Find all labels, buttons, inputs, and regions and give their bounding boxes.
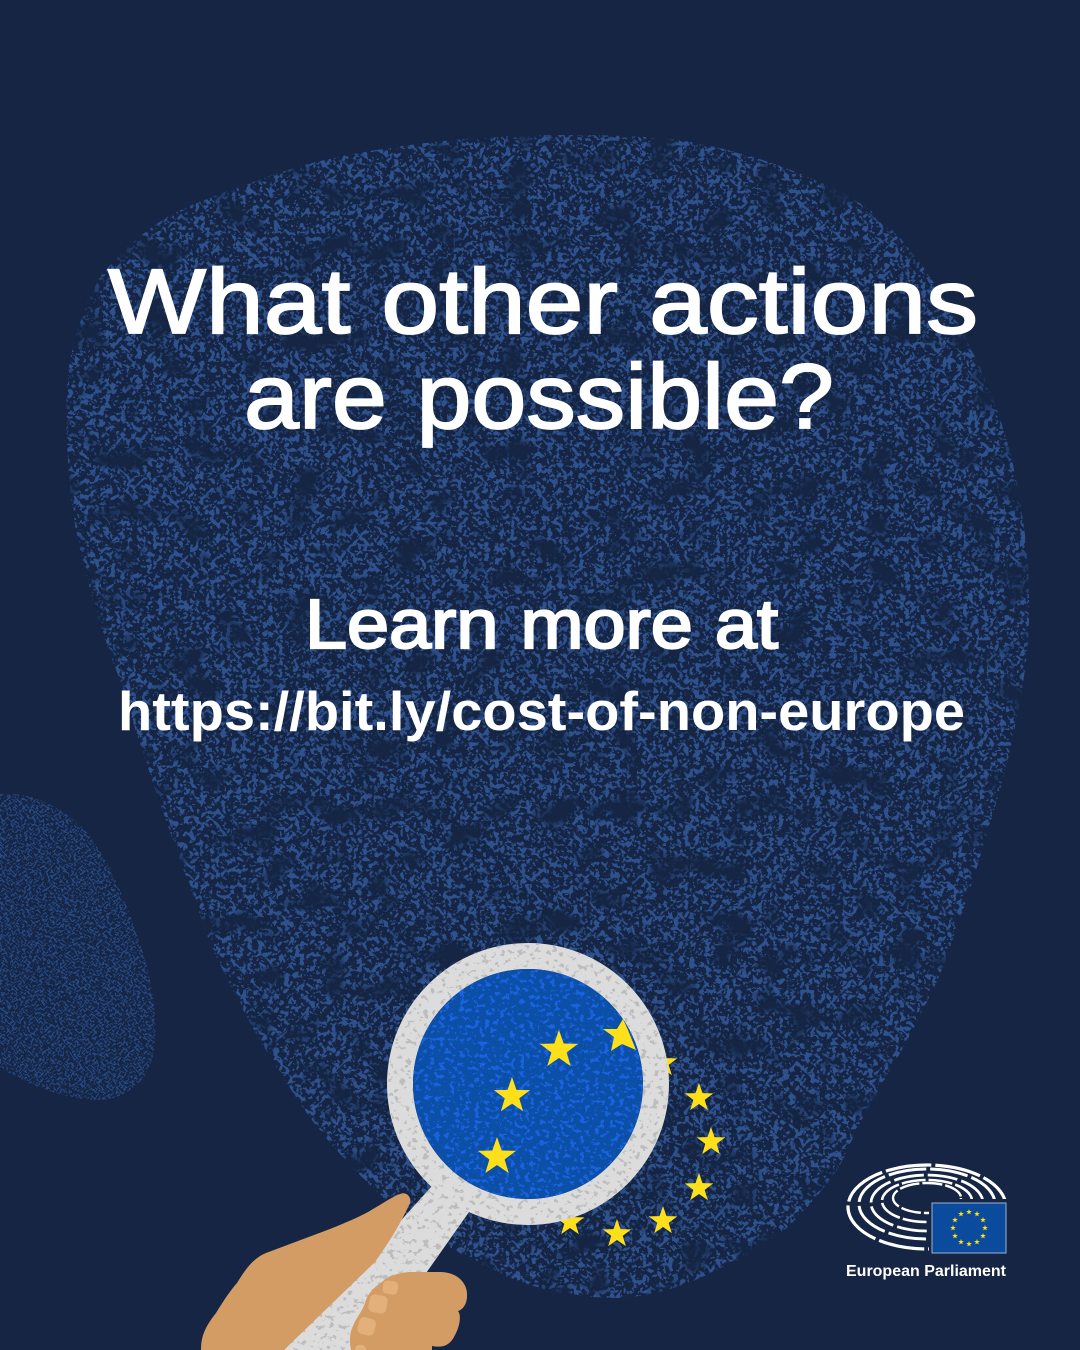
- palm and thumb: [201, 1193, 410, 1350]
- title: What other actions: [108, 251, 978, 353]
- magnifier handle: [284, 1186, 469, 1350]
- magnifier grain: [284, 943, 668, 1350]
- icon: magnifying glass: [284, 943, 668, 1350]
- flag stars: [950, 1209, 988, 1246]
- call to action: Learn more at: [305, 585, 778, 663]
- lens texture: [413, 969, 643, 1199]
- lens: [413, 969, 643, 1199]
- fingers: [350, 1272, 467, 1350]
- magnifier rim: [400, 956, 656, 1212]
- title: are possible?: [244, 346, 834, 448]
- outer ring of EU stars: [556, 1048, 725, 1246]
- logo: European Parliament: [846, 1165, 1006, 1280]
- link: https://bit.ly/cost-of-non-europe: [118, 680, 965, 742]
- stars inside the lens: [478, 1019, 636, 1173]
- textured small blob: [0, 794, 156, 1100]
- logo wordmark: European Parliament: [846, 1263, 1006, 1280]
- fingernails: [355, 1280, 399, 1350]
- hemicycle: [848, 1165, 1006, 1249]
- title: [108, 251, 978, 448]
- EU flag: [932, 1203, 1006, 1253]
- icon: hand: [201, 1193, 467, 1350]
